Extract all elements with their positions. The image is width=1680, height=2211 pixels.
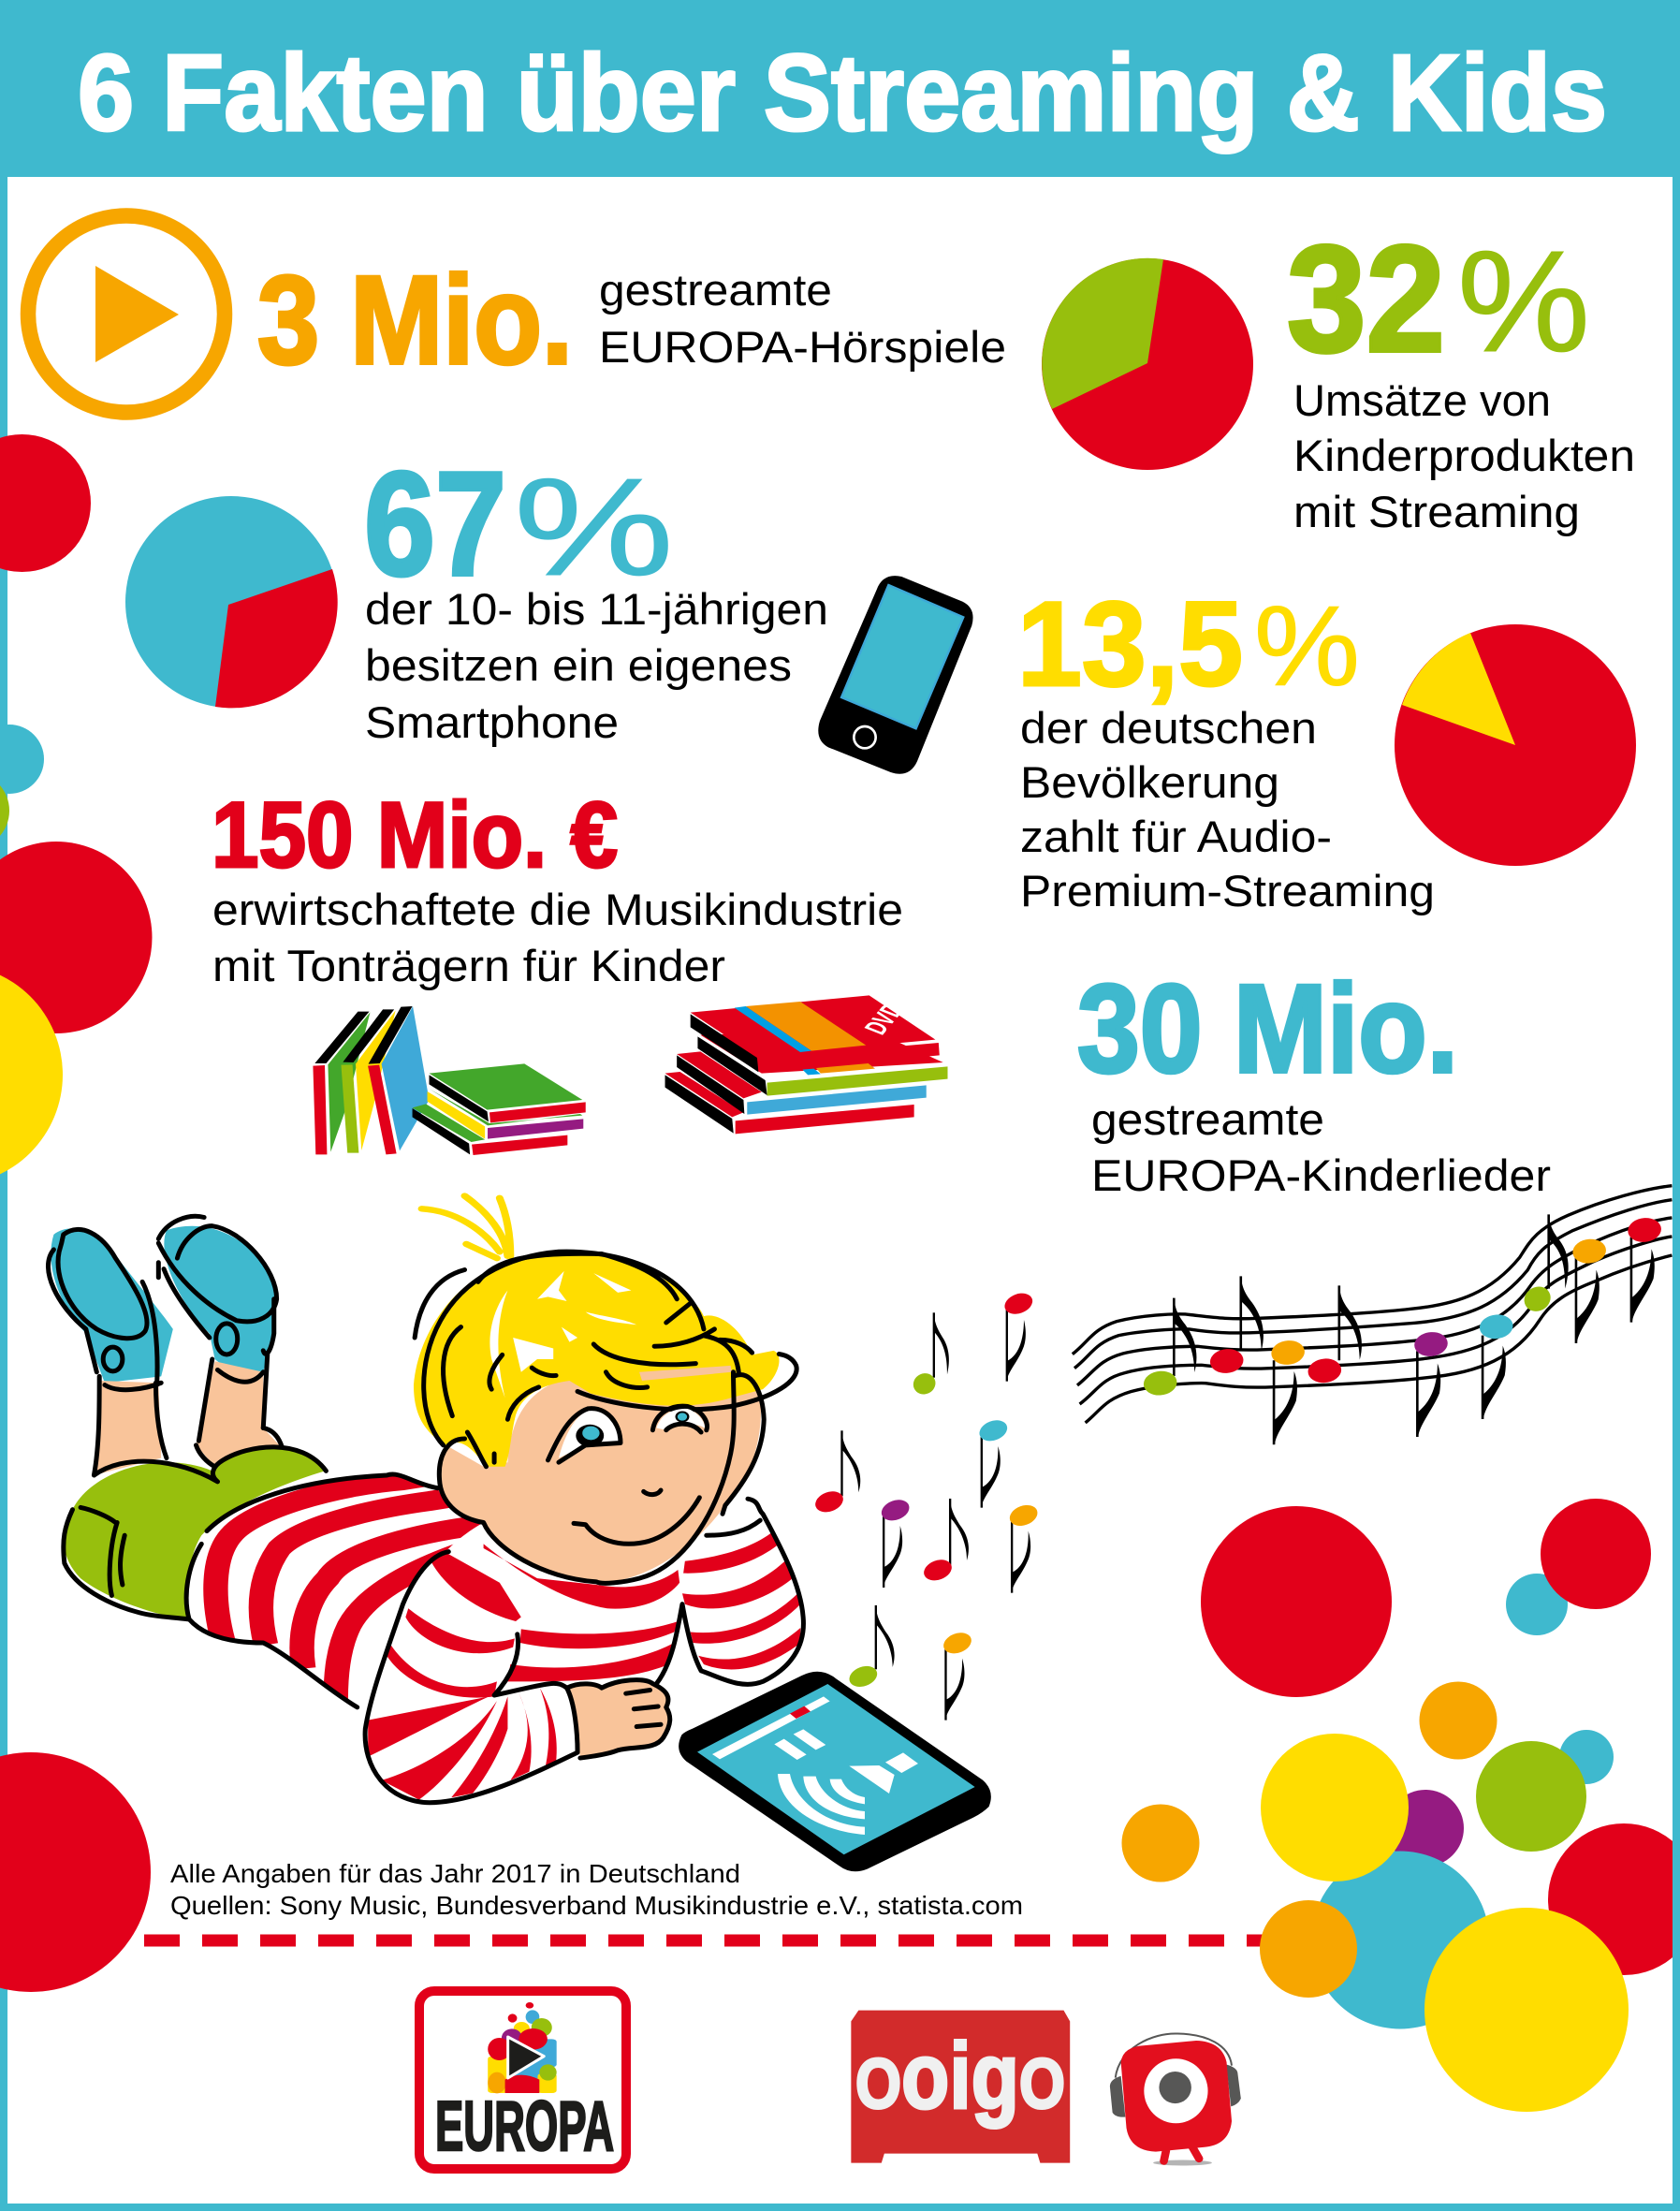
right border strip — [1673, 177, 1680, 2211]
logo: EUROPA — [419, 1991, 626, 2169]
footnote: sources: Quellen: Sony Music, Bundesverband Musikindustrie e.V., statista.com — [170, 1891, 1023, 1920]
stat: 150 Mio. Euro: 150 Mio. € — [212, 783, 618, 886]
text: gestreamte EUROPA-Kinderlieder — [1091, 1094, 1551, 1200]
floating music notes — [812, 1290, 1041, 1720]
stat: 3 Mio.: 3 Mio. — [257, 251, 573, 390]
text: der deutschen Bevölkerung — [1020, 703, 1435, 915]
pie chart: 13,5 percent — [1395, 624, 1636, 866]
stat: 13,5 %: % — [1254, 582, 1360, 710]
footnote: sources: Alle Angaben für das Jahr 2017 in Deutschland — [170, 1859, 740, 1888]
stat: 67 % — [364, 442, 674, 607]
text: Umsätze von Kinderprodukten mit Streaming: mit Streaming — [1293, 487, 1580, 536]
music staff with notes — [1073, 1186, 1672, 1444]
title: 6 Fakten über Streaming & Kids — [78, 32, 1607, 154]
logo: Ooigo — [851, 2011, 1070, 2163]
text: erwirtschaftete die Musikindustrie — [212, 885, 903, 990]
stat: 67 %: 67 — [364, 442, 506, 607]
text: erwirtschaftete die Musikindustrie: erwirtschaftete die Musikindustrie — [212, 885, 903, 934]
left edge bubbles — [0, 434, 152, 1992]
text: der 10- bis 11-jährigen: Smartphone — [365, 697, 619, 747]
icon: CD and book stacks — [313, 995, 948, 1155]
text: Umsätze von Kinderprodukten mit Streaming: Umsätze von — [1293, 375, 1551, 425]
text: gestreamte EUROPA-Hörspiele: gestreamte — [599, 265, 832, 315]
stat: 67 %: % — [514, 450, 674, 605]
text: der deutschen Bevölkerung: Bevölkerung — [1020, 757, 1279, 807]
pie chart: 32 percent — [1042, 258, 1253, 470]
icon: play button — [28, 215, 225, 412]
stat: 32 %: % — [1457, 221, 1590, 382]
illustration: boy lying on the floor — [48, 1196, 803, 1803]
text: gestreamte EUROPA-Kinderlieder: EUROPA-Kinderlieder — [1091, 1150, 1551, 1200]
stat: 32 % — [1287, 214, 1590, 384]
stat: 13,5 % — [1017, 578, 1360, 711]
text: erwirtschaftete die Musikindustrie: mit Tonträgern für Kinder — [212, 941, 725, 990]
text: Umsätze von Kinderprodukten mit Streaming — [1293, 375, 1635, 536]
pie chart: 67 percent — [125, 496, 338, 708]
text: der 10- bis 11-jährigen: der 10- bis 11-jährigen — [365, 584, 828, 634]
icon: CD and book stacks: DVD — [858, 1000, 911, 1038]
text: gestreamte EUROPA-Kinderlieder: gestreamte — [1091, 1094, 1324, 1144]
text: Umsätze von Kinderprodukten mit Streaming: Kinderprodukten — [1293, 431, 1635, 480]
text: der deutschen Bevölkerung: der deutschen — [1020, 703, 1317, 753]
text: der 10- bis 11-jährigen — [365, 584, 828, 747]
stat: 30 Mio.: 30 Mio. — [1077, 959, 1458, 1099]
logo: EUROPA: EUROPA — [435, 2087, 614, 2165]
stat: 13,5 %: 13,5 — [1017, 578, 1243, 711]
icon: Ooigo mascot with headphones — [1110, 2033, 1241, 2165]
text: der deutschen Bevölkerung: zahlt für Audio- — [1020, 812, 1332, 861]
right bubbles cluster — [1121, 1499, 1680, 2112]
footnote: sources — [170, 1859, 1023, 1920]
text: gestreamte EUROPA-Hörspiele: EUROPA-Hörspiele — [599, 322, 1006, 372]
text: der deutschen Bevölkerung: Premium-Streaming — [1020, 866, 1435, 915]
stat: 32 %: 32 — [1287, 214, 1445, 384]
logo: Ooigo: OoigO — [855, 2024, 1065, 2129]
icon: tablet — [679, 1672, 991, 1871]
text: gestreamte EUROPA-Hörspiele — [599, 265, 1006, 372]
text: der 10- bis 11-jährigen: besitzen ein eigenes — [365, 640, 792, 690]
icon: smartphone — [818, 576, 973, 774]
